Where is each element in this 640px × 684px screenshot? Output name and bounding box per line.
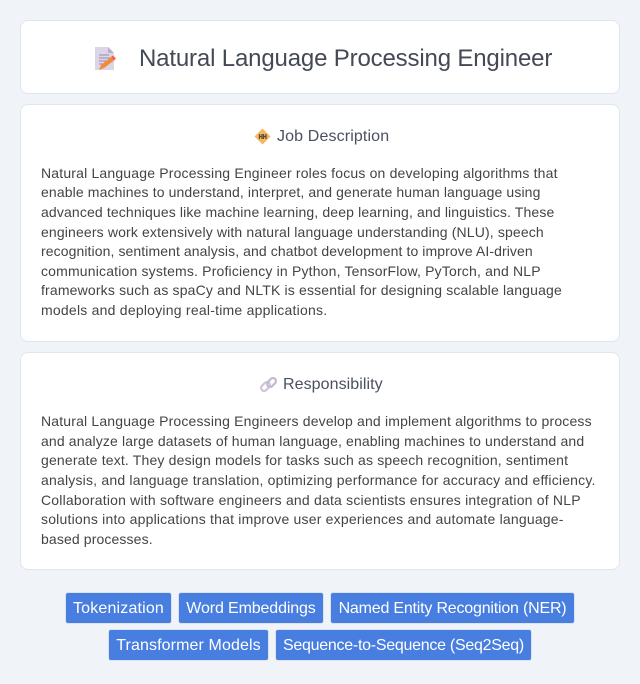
responsibility paragraph: Collaboration with software engineers and data scientists ensures integration of NLP xyxy=(41,492,581,508)
job description paragraph: enable machines to understand, interpret, and generate human language using xyxy=(41,184,540,200)
keyword tags xyxy=(65,592,575,661)
tag: word embeddings xyxy=(178,592,324,624)
tag: tokenization xyxy=(65,592,172,624)
panel: title card xyxy=(20,20,620,94)
responsibility paragraph: based processes. xyxy=(41,531,153,547)
tag: tokenization: Tokenization xyxy=(73,600,164,617)
job description paragraph: recognition, sentiment analysis, and chatbot development to improve AI-driven xyxy=(41,243,533,259)
icon: orange diamond xyxy=(254,128,270,144)
responsibility paragraph: analysis, and language translation, optimizing performance for accuracy and efficiency. xyxy=(41,472,596,488)
responsibility paragraph: Natural Language Processing Engineers develop and implement algorithms to process xyxy=(41,413,592,429)
responsibility paragraph: and analyze large datasets of human language, enabling machines to understand and xyxy=(41,433,584,449)
heading: job description: Job Description xyxy=(277,128,389,145)
tag: word embeddings: Word Embeddings xyxy=(186,600,316,617)
panel: responsibility xyxy=(20,352,620,570)
tag: transformer models: Transformer Models xyxy=(116,637,261,654)
tag: transformer models xyxy=(108,629,269,661)
responsibility paragraph xyxy=(41,413,596,547)
tag: named entity recognition xyxy=(330,592,575,624)
job description paragraph: Natural Language Processing Engineer roles focus on developing algorithms that xyxy=(41,165,558,181)
responsibility paragraph: generate text. They design models for tasks such as speech recognition, sentiment xyxy=(41,452,568,468)
heading: responsibility: Responsibility xyxy=(283,376,383,393)
job description content xyxy=(41,128,562,318)
tag: sequence-to-sequence: Sequence-to-Sequence (Seq2Seq) xyxy=(283,637,524,654)
job description paragraph xyxy=(41,165,562,318)
title: Natural Language Processing Engineer xyxy=(139,45,552,72)
job description paragraph: frameworks such as spaCy and NLTK is essential for designing scalable language xyxy=(41,282,562,298)
icon: document with pencil xyxy=(95,47,116,70)
responsibility paragraph: solutions into applications that improve user experiences and automate language- xyxy=(41,511,564,527)
job description paragraph: engineers work extensively with natural language understanding (NLU), speech xyxy=(41,224,544,240)
panel: job description xyxy=(20,104,620,342)
job description paragraph: models and deploying real-time applications. xyxy=(41,302,327,318)
tag: sequence-to-sequence xyxy=(275,629,532,661)
job description paragraph: advanced techniques like machine learning, deep learning, and linguistics. These xyxy=(41,204,554,220)
icon: chain link xyxy=(260,377,277,392)
tag: named entity recognition: Named Entity Recognition (NER) xyxy=(339,600,566,617)
job description paragraph: communication systems. Proficiency in Python, TensorFlow, PyTorch, and NLP xyxy=(41,263,541,279)
